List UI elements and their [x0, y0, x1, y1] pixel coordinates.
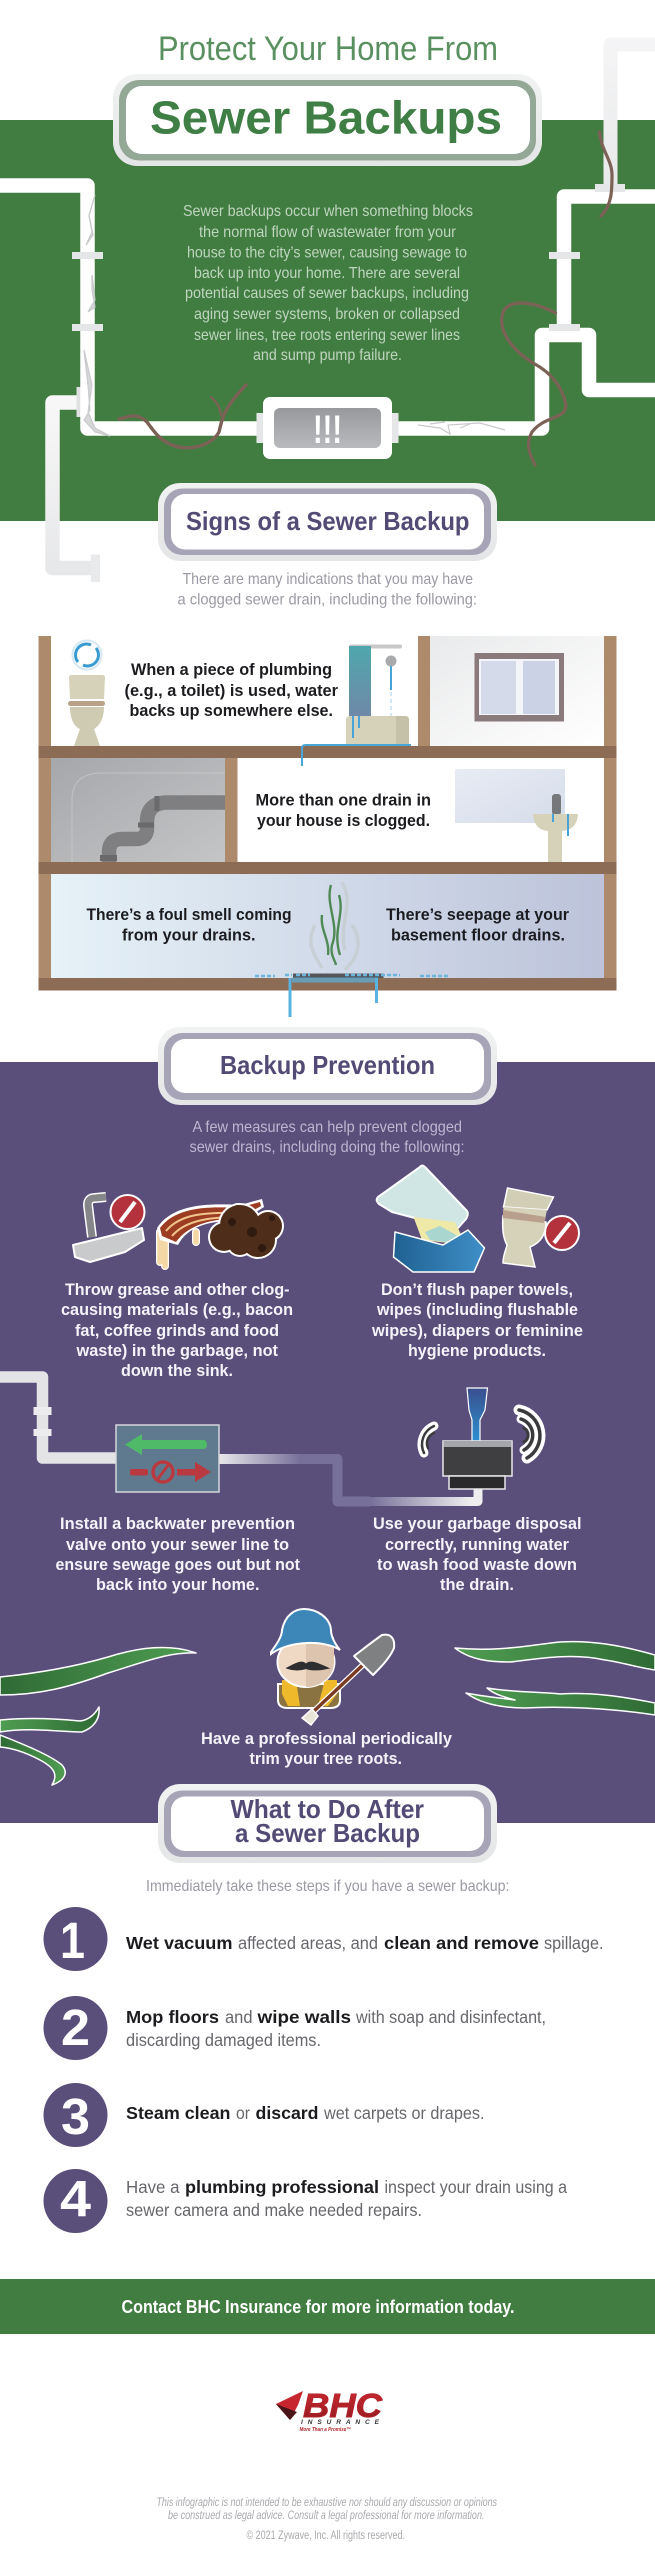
- pipe cracks: [84, 195, 505, 436]
- heading: Sewer Backups: Sewer Backups: [150, 92, 502, 144]
- icon: foul smell and floor drain: [255, 882, 450, 1017]
- text: trim roots: trim your tree roots.: [250, 1750, 402, 1768]
- step 2: [44, 1996, 546, 2060]
- heading: What to Do After a Sewer Backup: [158, 1784, 497, 1863]
- contact band: Contact BHC Insurance for more information today.: [122, 2297, 514, 2317]
- text: backwater valve: back into your home.: [96, 1576, 260, 1594]
- text: garbage disposal: Use your garbage disposal: [373, 1515, 582, 1533]
- logo: BHC Insurance: More Than a Promise™: [300, 2427, 351, 2433]
- text: throw grease: waste) in the garbage, not: [76, 1342, 278, 1360]
- step 3: [44, 2083, 484, 2147]
- text: backwater valve: Install a backwater prevention: [60, 1515, 295, 1533]
- text: backwater valve: valve onto your sewer line to: [66, 1536, 289, 1554]
- text: more than one drain: [256, 792, 431, 830]
- panel: green intro band: [0, 120, 655, 521]
- text: seepage: There’s seepage at your: [386, 906, 570, 924]
- text: don't flush: wipes (including flushable: [376, 1301, 578, 1319]
- pipe network: intro: [0, 44, 655, 582]
- text: garbage disposal: correctly, running water: [385, 1536, 570, 1554]
- heading: Signs of a Sewer Backup: Signs of a Sewer Backup: [186, 506, 470, 536]
- icon: bacon and grease: [157, 1199, 264, 1266]
- icon: sink with no symbol: [73, 1195, 144, 1262]
- text: steps intro: Immediately take these steps if you have a sewer backup:: [146, 1878, 510, 1895]
- leaf: upper left: [0, 1648, 196, 1695]
- icon: blocked valve: [256, 397, 398, 459]
- icon: garbage disposal: [422, 1388, 540, 1489]
- text: disclaimer: This infographic is not intended to be exhaustive nor should any discussion or opinions: [156, 2497, 497, 2509]
- text: signs intro: [178, 571, 477, 608]
- text: prevention intro: [190, 1119, 464, 1156]
- text: intro paragraph: and sump pump failure.: [253, 347, 402, 364]
- step 3: wet carpets or drapes.: [323, 2103, 484, 2123]
- step 2: 2: [61, 1999, 90, 2056]
- decoration: green root leaves: [0, 1642, 655, 1785]
- step 4: inspect your drain using a: [384, 2177, 567, 2197]
- step 4: 4: [60, 2170, 92, 2227]
- step 1: clean and remove: [384, 1933, 539, 1953]
- house floors: [38, 746, 616, 990]
- heading: Signs of a Sewer Backup: [158, 483, 497, 561]
- room backgrounds: [430, 636, 604, 746]
- text: throw grease: Throw grease and other clog-: [65, 1281, 290, 1299]
- text: don't flush: wipes), diapers or feminine: [371, 1322, 583, 1340]
- text: trim roots: [201, 1730, 453, 1768]
- step 3: Steam clean: [126, 2103, 230, 2123]
- text: backwater valve: [56, 1515, 300, 1594]
- step 1: affected areas, and: [238, 1933, 378, 1953]
- panel: purple prevention band: [0, 1062, 655, 1823]
- text: intro paragraph: sewer lines, tree roots entering sewer lines: [194, 327, 460, 344]
- icon: mirror and sink: [455, 769, 578, 862]
- text: foul smell: from your drains.: [122, 926, 256, 944]
- icon: overflow water on floor: [302, 745, 411, 766]
- step 4: plumbing professional: [185, 2177, 379, 2197]
- step 2: discarding damaged items.: [126, 2030, 321, 2050]
- text: intro paragraph: the normal flow of wastewater from your: [199, 224, 457, 241]
- step 3: discard: [256, 2103, 318, 2123]
- text: copyright: © 2021 Zywave, Inc. All rights reserved.: [246, 2530, 405, 2542]
- text: don't flush: [371, 1281, 583, 1360]
- text: intro paragraph: potential causes of sewer backups, including: [185, 285, 469, 302]
- step 1: [44, 1907, 604, 1971]
- pipe: lower left gray: [52, 402, 91, 568]
- text: garbage disposal: to wash food waste down: [377, 1556, 577, 1574]
- text: throw grease: down the sink.: [121, 1362, 233, 1380]
- pipe: right branch: [564, 196, 655, 330]
- text: foul smell: [86, 906, 292, 944]
- icon: toilet with no symbol: [503, 1188, 579, 1267]
- icon: shower and tub: [346, 644, 409, 744]
- logo: BHC Insurance: INSURANCE: [301, 2419, 380, 2426]
- step 1: Wet vacuum: [126, 1933, 232, 1953]
- step 1: 1: [60, 1912, 85, 1969]
- icon: plumber with shovel: [271, 1609, 394, 1725]
- icon: recycling water arrows: [72, 640, 102, 670]
- text: don't flush: Don’t flush paper towels,: [381, 1281, 573, 1299]
- text: plumbing backs up: [124, 661, 339, 720]
- icon: paper towels and wipes: [377, 1166, 484, 1272]
- text: don't flush: hygiene products.: [408, 1342, 546, 1360]
- step 3: 3: [61, 2088, 90, 2145]
- heading: Backup Prevention: [158, 1027, 497, 1105]
- text: backwater valve: ensure sewage goes out but not: [56, 1556, 300, 1574]
- heading: What to Do After a Sewer Backup: a Sewer Backup: [235, 1818, 420, 1848]
- text: disclaimer: be construed as legal advice. Consult a legal professional for more information.: [168, 2510, 484, 2522]
- logo: BHC Insurance: [276, 2387, 383, 2433]
- icon: basement pipe: [100, 796, 225, 862]
- pipe: main white run: [0, 186, 655, 428]
- heading: What to Do After a Sewer Backup: What to Do After: [230, 1794, 424, 1824]
- text: intro paragraph: Sewer backups occur when something blocks: [183, 203, 473, 220]
- text: signs intro: a clogged sewer drain, including the following:: [178, 592, 477, 608]
- panel: house cross-section: [38, 636, 616, 1017]
- text: intro paragraph: back up into your home. There are several: [194, 265, 460, 282]
- step 1: spillage.: [544, 1933, 604, 1953]
- step 4: Have a: [126, 2177, 180, 2197]
- step 2: with soap and disinfectant,: [355, 2007, 546, 2027]
- leaf: lower left: [0, 1707, 99, 1732]
- text: more than one drain: your house is clogged.: [257, 812, 430, 830]
- heading: Backup Prevention: Backup Prevention: [220, 1050, 435, 1080]
- text: intro paragraph: [183, 203, 473, 364]
- leaf: upper right: [455, 1642, 655, 1670]
- leaf: lower right: [466, 1688, 655, 1715]
- house walls: [38, 636, 616, 990]
- heading: Sewer Backups: [113, 74, 542, 166]
- text: plumbing backs up: backs up somewhere else.: [130, 702, 333, 720]
- step 4: [44, 2169, 567, 2233]
- pipe: top right gray: [610, 44, 655, 190]
- text: prevention intro: sewer drains, including doing the following:: [190, 1139, 464, 1156]
- icon: window: [474, 653, 564, 722]
- text: signs intro: There are many indications that you may have: [182, 571, 473, 588]
- step 4: sewer camera and make needed repairs.: [126, 2200, 422, 2220]
- text: foul smell: There’s a foul smell coming: [86, 906, 292, 924]
- text: garbage disposal: [373, 1515, 582, 1594]
- step 2: wipe walls: [256, 2007, 351, 2027]
- text: throw grease: fat, coffee grinds and food: [75, 1322, 279, 1340]
- tree roots: [119, 132, 612, 465]
- pipe flanges: [72, 184, 625, 331]
- text: intro paragraph: aging sewer systems, broken or collapsed: [194, 306, 460, 323]
- leaf: lower left curl: [0, 1735, 65, 1785]
- logo: BHC Insurance: BHC: [303, 2387, 383, 2424]
- text: trim roots: Have a professional periodically: [201, 1730, 453, 1748]
- text: plumbing backs up: (e.g., a toilet) is used, water: [124, 682, 339, 700]
- title: Protect Your Home From: Protect Your Home From: [158, 30, 498, 68]
- step 2: and: [225, 2007, 252, 2027]
- step 3: or: [236, 2103, 250, 2123]
- text: prevention intro: A few measures can help prevent clogged: [192, 1119, 462, 1136]
- text: garbage disposal: the drain.: [440, 1576, 514, 1594]
- icon: toilet: [68, 675, 105, 746]
- icon: blocked valve: !!!: [313, 408, 342, 452]
- text: seepage: [386, 906, 570, 944]
- step 2: Mop floors: [126, 2007, 219, 2027]
- text: more than one drain: More than one drain in: [256, 792, 431, 810]
- text: throw grease: [61, 1281, 293, 1380]
- text: intro paragraph: house to the city’s sewer, causing sewage to: [187, 244, 467, 262]
- icon: backwater valve and pipes: [0, 1377, 478, 1502]
- contact band: [0, 2279, 655, 2334]
- text: plumbing backs up: When a piece of plumbing: [131, 661, 332, 679]
- text: seepage: basement floor drains.: [391, 926, 565, 944]
- text: throw grease: causing materials (e.g., bacon: [61, 1301, 293, 1319]
- icon: coffee grounds: [208, 1203, 284, 1259]
- text: disclaimer: [156, 2497, 497, 2522]
